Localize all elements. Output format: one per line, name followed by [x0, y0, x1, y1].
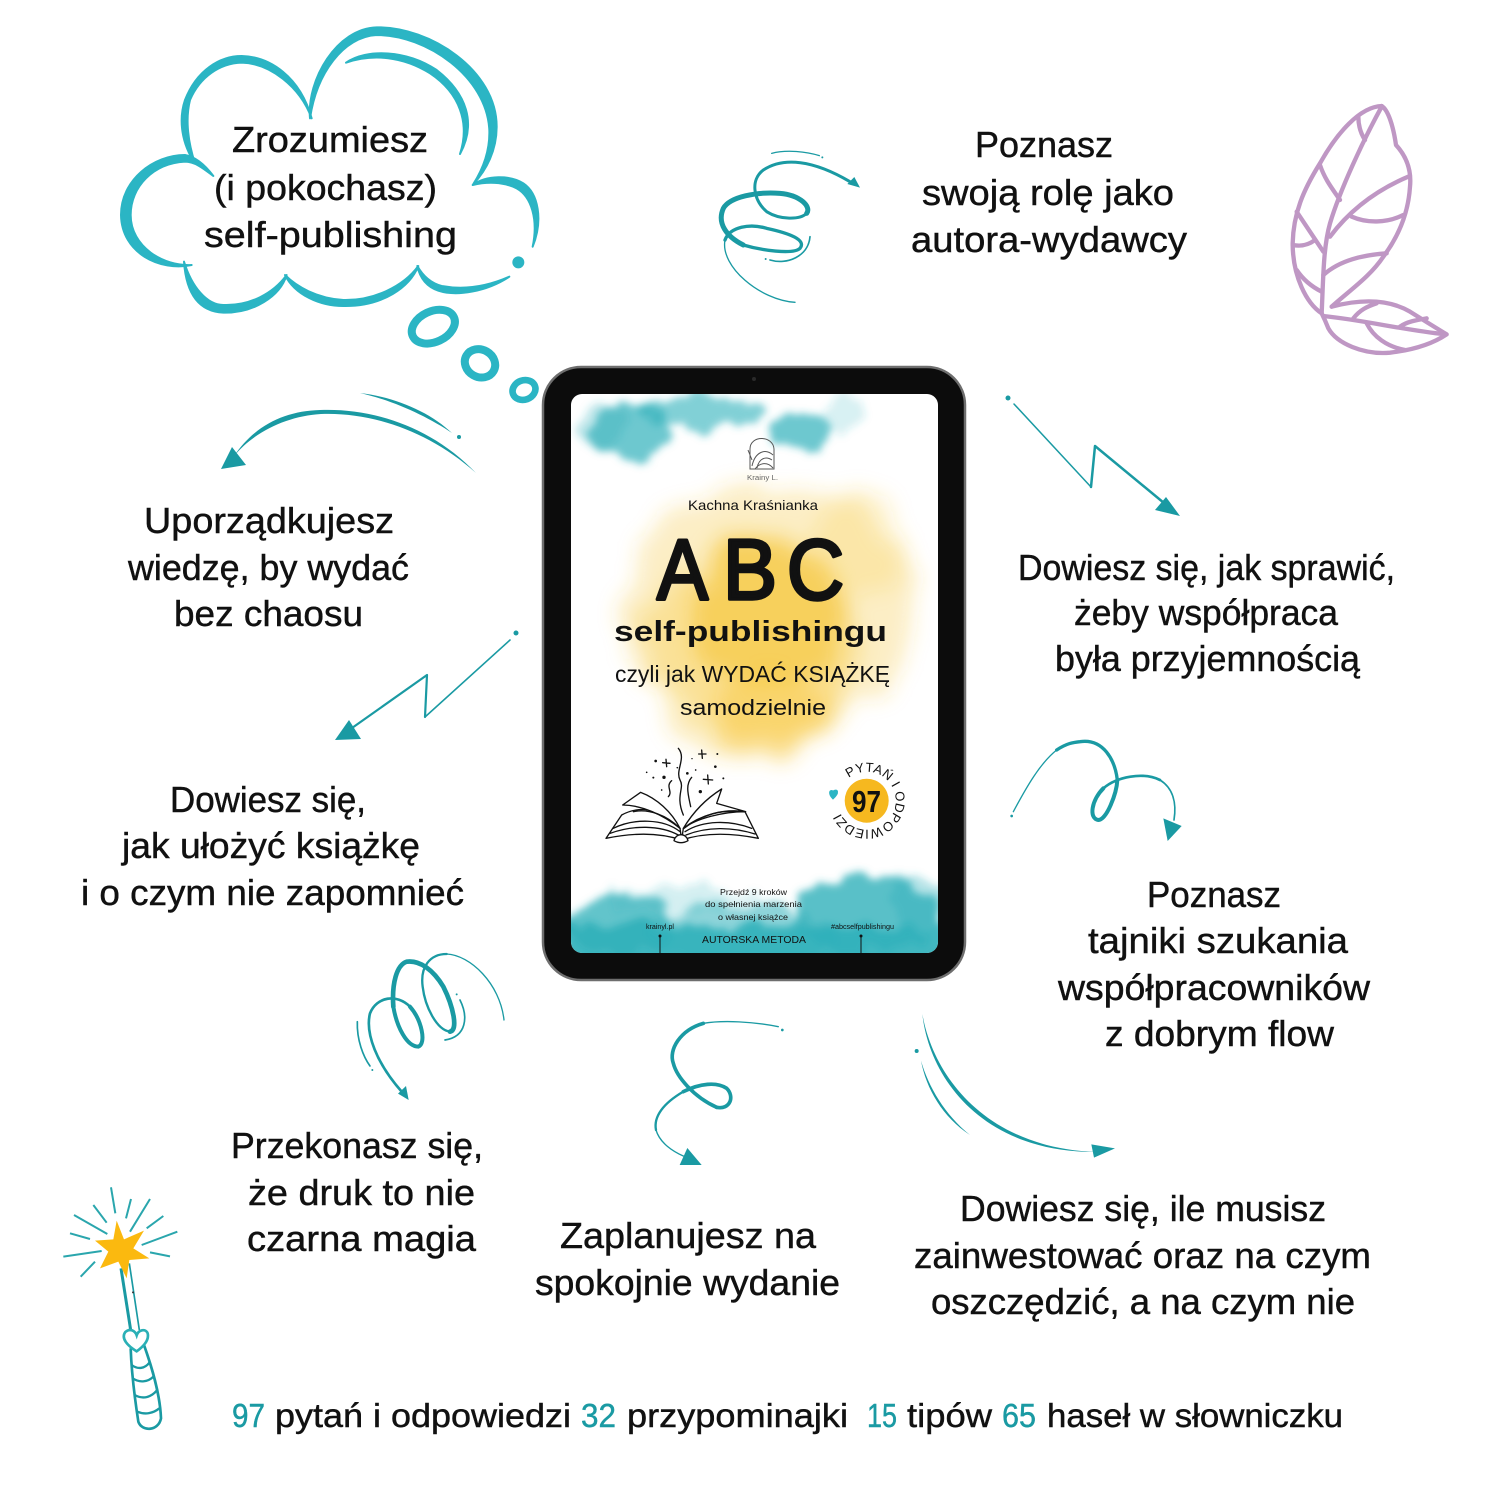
- thought cloud: [121, 27, 538, 403]
- cover small arrows: [659, 935, 862, 953]
- text: role: Poznasz: [975, 124, 1113, 165]
- text: book layout: [81, 779, 464, 913]
- text: order: bez chaosu: [174, 593, 363, 634]
- text: cooperation: Dowiesz się, jak sprawić,: [1018, 547, 1395, 588]
- screen with cover: [571, 394, 938, 953]
- stats line: haseł w słowniczku: [1047, 1397, 1343, 1434]
- arrow: loop to planning: [656, 1022, 784, 1165]
- text: book layout: i o czym nie zapomnieć: [81, 872, 464, 913]
- stats line: przypominajki: [627, 1397, 848, 1434]
- text: collaborators: współpracowników: [1057, 967, 1371, 1008]
- text: role: [911, 124, 1187, 260]
- text: planning: spokojnie wydanie: [535, 1262, 840, 1303]
- text: cooperation: była przyjemnością: [1055, 638, 1361, 679]
- cover title line 2: self-publishingu: [614, 616, 887, 648]
- watercolor: yellow: [625, 485, 915, 757]
- arrow: loop to collaborators: [1010, 741, 1182, 841]
- arrow: lightning right: [1006, 396, 1180, 516]
- text: planning: [535, 1215, 840, 1303]
- text: print: [231, 1125, 483, 1259]
- text: budget: [914, 1188, 1371, 1322]
- stats line: tipów: [907, 1397, 992, 1434]
- tablet body: [543, 367, 965, 980]
- stats line: [232, 1397, 1343, 1434]
- text: order: Uporządkujesz: [144, 500, 394, 541]
- badge 97: 97: [852, 784, 881, 819]
- logo label: Krainy L.: [747, 475, 778, 482]
- open book illustration: [606, 748, 758, 843]
- text: role: swoją rolę jako: [922, 172, 1174, 213]
- stats line: 65: [1002, 1397, 1036, 1434]
- icon: leaf: [1293, 106, 1447, 353]
- watercolor: bottom teal: [571, 866, 938, 953]
- text: collaborators: tajniki szukania: [1088, 920, 1349, 961]
- arrow: spiral to print: [357, 954, 504, 1100]
- camera: [752, 377, 756, 381]
- text: cloud: self-publishing: [204, 214, 457, 255]
- text: budget: zainwestować oraz na czym: [914, 1235, 1371, 1276]
- stats line: 32: [581, 1397, 616, 1434]
- tablet with book cover: [542, 366, 966, 982]
- text: cloud: [204, 119, 457, 255]
- cover footer text: #abcselfpublishingu: [831, 924, 894, 931]
- text: book layout: jak ułożyć książkę: [121, 825, 420, 866]
- cover footer text: o własnej książce: [718, 912, 788, 922]
- text: role: autora-wydawcy: [911, 219, 1187, 260]
- cover title ABC: C: [787, 523, 844, 618]
- watercolor: top teal: [576, 396, 865, 460]
- cover title ABC: B: [723, 523, 777, 618]
- text: cooperation: żeby współpraca: [1074, 592, 1339, 633]
- text: print: że druk to nie: [248, 1172, 475, 1213]
- text: cloud: Zrozumiesz: [232, 119, 428, 160]
- stats line: pytań i odpowiedzi: [275, 1397, 571, 1434]
- text: budget: Dowiesz się, ile musisz: [960, 1188, 1326, 1229]
- cover footer text: do spełnienia marzenia: [705, 899, 802, 909]
- icon: magic wand: [63, 1187, 177, 1429]
- cover title ABC: [656, 538, 843, 602]
- arrow: lightning left: [335, 630, 518, 740]
- badge 97: PYTAŃ I ODPOWIEDZI: [833, 762, 905, 839]
- cover subtitle line 2: samodzielnie: [680, 695, 826, 720]
- text: order: wiedzę, by wydać: [127, 547, 409, 588]
- cover subtitle: czyli jak WYDAĆ KSIĄŻKĘ: [615, 661, 890, 687]
- text: cooperation: [1018, 547, 1395, 679]
- arrow: curve to budget: [915, 1014, 1115, 1158]
- text: collaborators: Poznasz: [1147, 874, 1281, 915]
- stats line: 97: [232, 1397, 265, 1434]
- text: print: czarna magia: [247, 1218, 477, 1259]
- stats line: 15: [867, 1397, 897, 1434]
- text: budget: oszczędzić, a na czym nie: [931, 1281, 1355, 1322]
- text: book layout: Dowiesz się,: [170, 779, 366, 820]
- text: planning: Zaplanujesz na: [560, 1215, 817, 1256]
- text: collaborators: z dobrym flow: [1105, 1013, 1335, 1054]
- text: order: [127, 500, 409, 634]
- logo: [748, 438, 774, 469]
- arrow: curved to order text: [221, 393, 476, 473]
- cover footer text: AUTORSKA METODA: [702, 934, 806, 946]
- arrow: spiral to role text: [721, 151, 860, 302]
- text: print: Przekonasz się,: [231, 1125, 483, 1166]
- cover footer text: [646, 887, 894, 946]
- text: cloud: (i pokochasz): [214, 167, 437, 208]
- cover footer text: krainyl.pl: [646, 924, 674, 931]
- author: Kachna Kraśnianka: [688, 497, 818, 513]
- text: collaborators: [1057, 874, 1371, 1054]
- cover title ABC: A: [657, 523, 708, 618]
- cover footer text: Przejdź 9 kroków: [720, 887, 788, 897]
